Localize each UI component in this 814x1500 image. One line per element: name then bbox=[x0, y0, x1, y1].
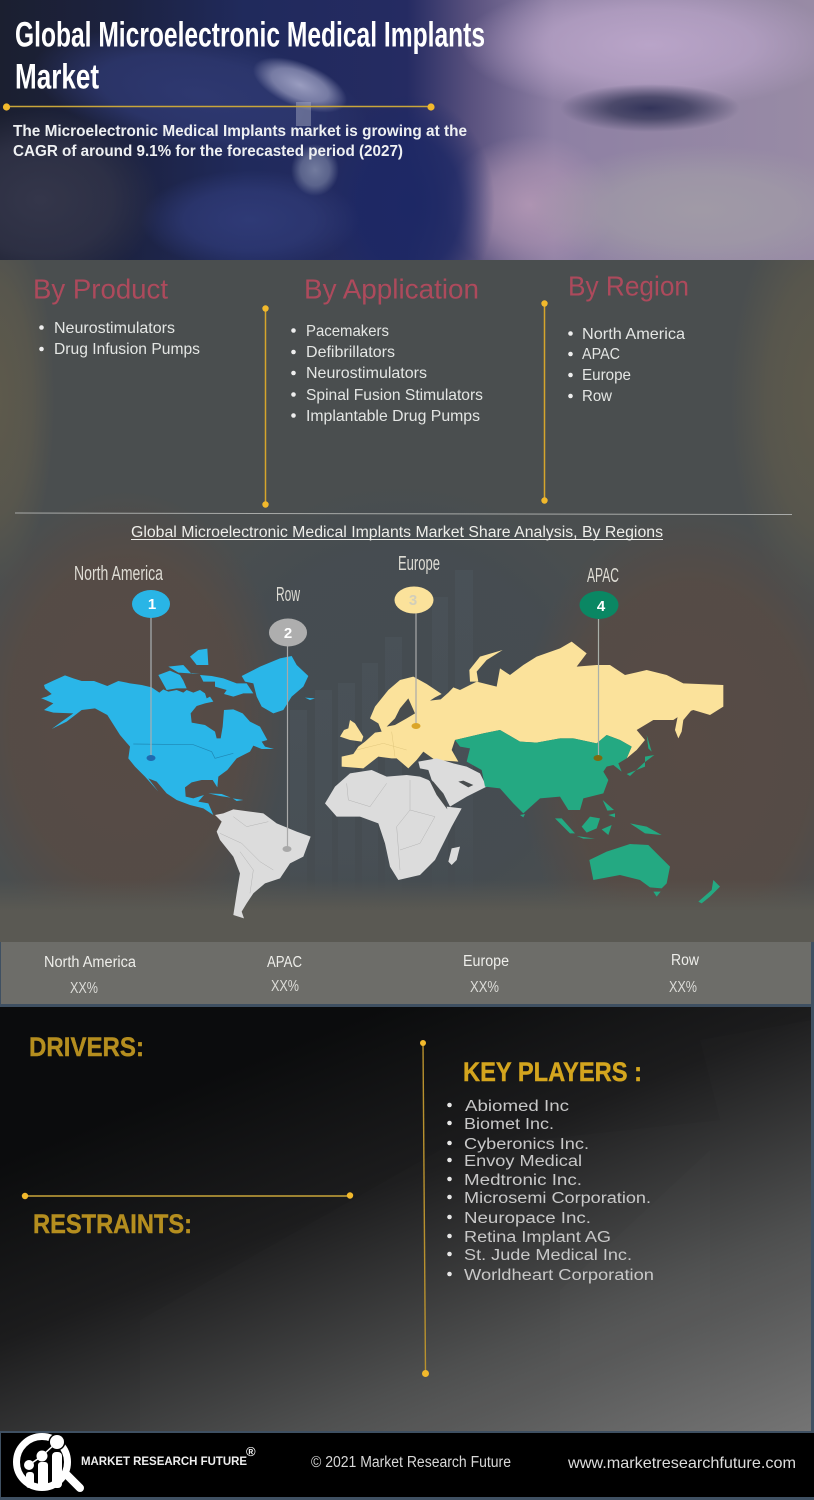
list: key players: Cyberonics Inc. bbox=[464, 1136, 589, 1153]
list: applications: Defibrillators bbox=[306, 344, 395, 361]
list: key players: Retina Implant AG bbox=[464, 1229, 611, 1246]
stat: europe: XX% bbox=[470, 979, 499, 996]
map pin: north america bbox=[74, 563, 170, 761]
list: key players: Microsemi Corporation. bbox=[464, 1190, 651, 1207]
panel: by region bbox=[568, 270, 689, 405]
divider: product and application bbox=[262, 305, 269, 508]
panel: by application bbox=[291, 274, 483, 425]
stat: europe bbox=[463, 953, 509, 996]
list: regions bbox=[568, 326, 685, 405]
panel: drivers restraints key players bbox=[0, 1007, 811, 1431]
map region: south america bbox=[215, 809, 311, 918]
heading: by product: By Product bbox=[33, 274, 168, 304]
copyright: © 2021 Market Research Future bbox=[311, 1454, 511, 1471]
map pin: north america: North America bbox=[74, 563, 164, 585]
map pin: row bbox=[269, 584, 307, 852]
panel: regional share strip bbox=[1, 942, 811, 1004]
stat: apac bbox=[267, 954, 302, 995]
list: key players: Biomet Inc. bbox=[464, 1116, 554, 1133]
stat: row bbox=[669, 952, 700, 996]
list: regions: North America bbox=[582, 326, 685, 343]
map section heading: Global Microelectronic Medical Implants Market Share Analysis, By Regions bbox=[131, 524, 663, 541]
summary text: The Microelectronic Medical Implants market is growing at the bbox=[13, 123, 467, 140]
map region: middle east and africa bbox=[325, 758, 487, 880]
stat: north america: North America bbox=[44, 954, 136, 971]
list: products: Drug Infusion Pumps bbox=[54, 341, 200, 358]
list: regions: Europe bbox=[582, 367, 631, 384]
brand name: MARKET RESEARCH FUTURE bbox=[81, 1456, 247, 1468]
panel: hero banner bbox=[0, 0, 814, 260]
map pin: apac: APAC bbox=[587, 565, 619, 587]
list: products bbox=[39, 320, 200, 358]
title: Global Microelectronic Medical Implants bbox=[15, 16, 485, 54]
icon: market research future logo bbox=[16, 1434, 80, 1488]
website: www.marketresearchfuture.com bbox=[567, 1455, 796, 1472]
world map bbox=[41, 642, 723, 918]
list: applications: Neurostimulators bbox=[306, 365, 427, 382]
list: regions: APAC bbox=[582, 346, 620, 363]
list: key players: Worldheart Corporation bbox=[464, 1267, 654, 1284]
panel: segmentation and map background bbox=[0, 260, 814, 942]
divider: drivers and key players bbox=[420, 1040, 429, 1377]
heading: by region: By Region bbox=[568, 270, 689, 302]
map region: north america bbox=[41, 649, 315, 815]
stat: north america: XX% bbox=[70, 980, 98, 997]
stat: north america bbox=[44, 954, 136, 997]
panel: footer bbox=[1, 1433, 814, 1497]
map pin: row: Row bbox=[276, 584, 300, 606]
list: key players: Neuropace Inc. bbox=[464, 1210, 591, 1227]
list: regions: Row bbox=[582, 388, 612, 405]
stat: row: XX% bbox=[669, 979, 697, 996]
title divider line bbox=[3, 103, 435, 111]
list: applications: Implantable Drug Pumps bbox=[306, 408, 480, 425]
stat: apac: XX% bbox=[271, 978, 299, 995]
stat: europe: Europe bbox=[463, 953, 509, 970]
map pin: europe: Europe bbox=[398, 553, 440, 575]
stat: row: Row bbox=[671, 952, 700, 969]
list: applications: Pacemakers bbox=[306, 323, 389, 340]
summary text bbox=[13, 123, 467, 160]
list: key players: St. Jude Medical Inc. bbox=[464, 1247, 632, 1264]
heading: by application: By Application bbox=[304, 274, 479, 304]
map pin: row: 2 bbox=[284, 625, 292, 642]
heading: key players: KEY PLAYERS : bbox=[463, 1057, 642, 1087]
map pin: europe bbox=[394, 553, 440, 729]
heading: drivers: DRIVERS: bbox=[29, 1032, 144, 1062]
panel: by product bbox=[33, 274, 200, 358]
map pin: north america: 1 bbox=[148, 596, 156, 613]
map pin: europe: 3 bbox=[409, 592, 417, 609]
list: applications: Spinal Fusion Stimulators bbox=[306, 387, 483, 404]
divider: drivers and restraints bbox=[22, 1192, 353, 1199]
title bbox=[15, 16, 485, 96]
map pin: apac: 4 bbox=[597, 598, 606, 615]
list: key players: Medtronic Inc. bbox=[464, 1172, 582, 1189]
divider: application and region bbox=[541, 300, 548, 504]
stat: apac: APAC bbox=[267, 954, 302, 971]
map pin: apac bbox=[580, 565, 619, 761]
list: applications bbox=[291, 323, 483, 425]
summary text: CAGR of around 9.1% for the forecasted period (2027) bbox=[13, 143, 403, 160]
map region: asia pacific bbox=[455, 730, 720, 903]
list: key players: Envoy Medical bbox=[464, 1153, 582, 1170]
map region: europe and russia bbox=[340, 642, 723, 768]
registered mark: ® bbox=[246, 1444, 256, 1459]
list: key players: Abiomed Inc bbox=[465, 1098, 569, 1115]
list: products: Neurostimulators bbox=[54, 320, 175, 337]
heading: restraints: RESTRAINTS: bbox=[33, 1209, 192, 1239]
list: key players bbox=[447, 1098, 654, 1284]
title: Market bbox=[15, 58, 99, 96]
